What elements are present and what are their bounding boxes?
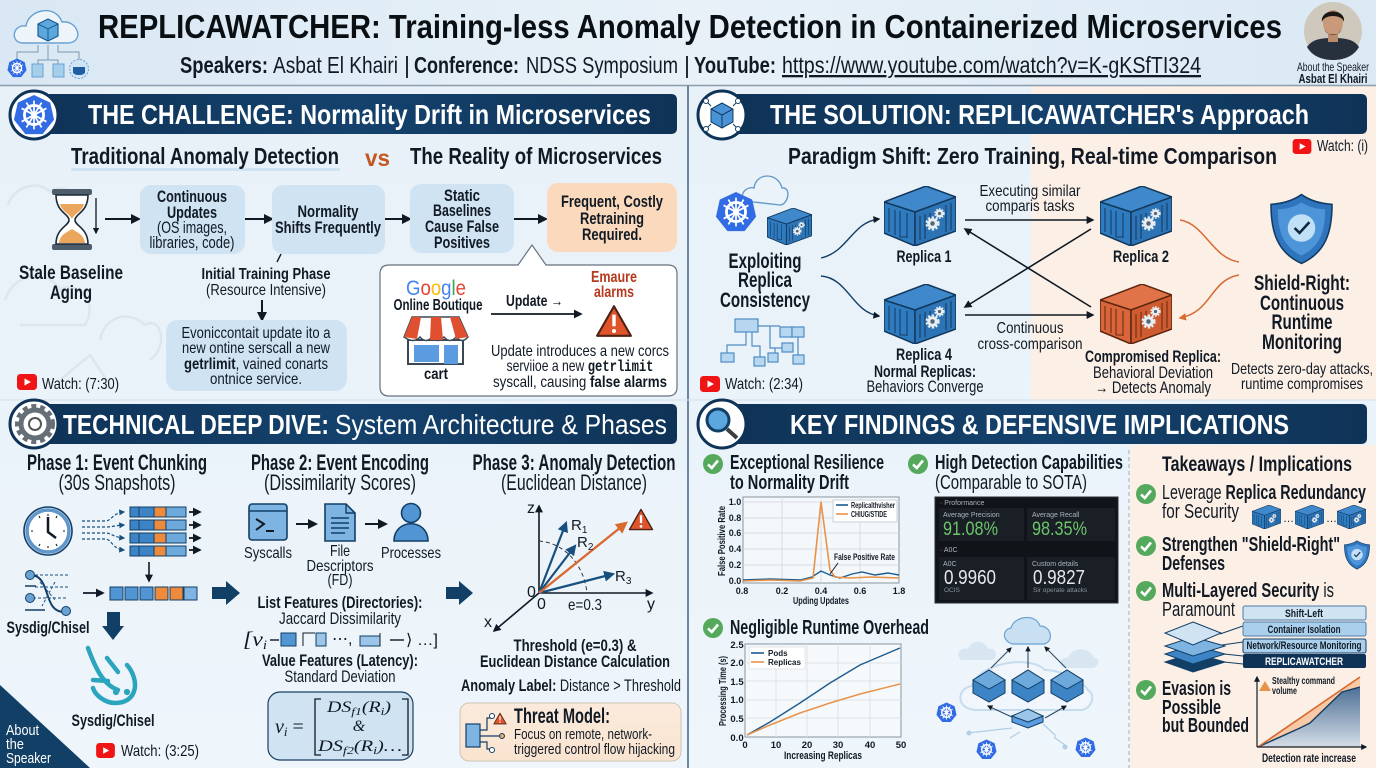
takeaway: evasion: Evasion is: [1162, 678, 1231, 700]
formula box: )…: [376, 738, 402, 755]
layer stack labels: [1243, 606, 1366, 668]
chart: false positive rate: 0.4: [815, 586, 827, 596]
finding: negligible overhead: Negligible Runtime Overhead: [730, 617, 929, 639]
arrow: [365, 523, 386, 525]
chart: processing time: 2.5: [730, 640, 744, 651]
initial training phase note: (Resource Intensive): [206, 282, 326, 299]
panel: key findings: [698, 400, 1370, 768]
chart: processing time: 30: [833, 740, 843, 751]
chart: processing time: 0: [742, 740, 748, 751]
chart: euclidean vector space: 2: [588, 542, 594, 553]
arrow: phase 1 to 2: [212, 581, 240, 605]
note: detects zero-day: [1231, 361, 1373, 393]
formula box: (R: [354, 738, 373, 755]
banner: the challenge: THE CHALLENGE: Normality Drift in Microservices: [88, 99, 651, 130]
banner: the challenge: [10, 91, 677, 139]
box: normality shifts: Shifts Frequently: [275, 219, 382, 237]
chart: evasion bound: Stealthy command: [1272, 675, 1335, 687]
finding: high detection: (Comparable to SOTA): [935, 472, 1087, 494]
box: static baselines: Cause False: [425, 218, 499, 236]
chart: false positive rate: False Positive Rate: [717, 506, 728, 576]
chart: processing time: 10: [771, 740, 781, 751]
chunk row: [83, 587, 197, 600]
icon: store: [404, 317, 468, 364]
box: continuous updates: Updates: [167, 204, 217, 222]
box: static baselines: Baselines: [433, 202, 491, 220]
alarm label: [591, 269, 637, 301]
dashboard: metrics: A0C: [943, 561, 957, 568]
chart: euclidean vector space: R: [571, 517, 582, 534]
chart: false positive rate: False Positive Rate: [834, 552, 895, 563]
icon: syscalls terminal: Syscalls: [244, 545, 292, 562]
replica 2: Replica 2: [1113, 247, 1169, 266]
takeaway: evasion: Possible: [1162, 697, 1221, 719]
chart: euclidean vector space: R: [577, 534, 588, 551]
chart: processing time: 2.0: [730, 658, 744, 669]
compromised replica: [1085, 284, 1221, 397]
speaker / conference line: |: [684, 52, 690, 78]
label: sysdig chisel logo: Sysdig/Chisel: [72, 711, 154, 730]
comparison heading: [71, 143, 662, 171]
label: executing similar: comparis tasks: [986, 198, 1074, 215]
heading: phase 3: Phase 3: Anomaly Detection: [472, 450, 676, 475]
dashboard: metrics: · A0C: [940, 547, 958, 554]
box: frequent retraining: Required.: [582, 225, 642, 244]
corner tab: about the speaker: the: [6, 736, 24, 753]
panel: the solution: [698, 91, 1373, 397]
finding: negligible overhead: [703, 617, 929, 639]
chart: processing time: 1.5: [730, 677, 744, 688]
heading: phase 3: (Euclidean Distance): [501, 470, 647, 495]
takeaway: shield-right: [1136, 534, 1370, 575]
chart: processing time: [718, 640, 906, 762]
chart: euclidean vector space: y: [647, 596, 655, 613]
header band: [0, 0, 1376, 86]
takeaway: replica redundancy: [1136, 482, 1367, 529]
formula box: i: [284, 724, 288, 739]
replica 1: Replica 1: [896, 247, 952, 266]
speaker / conference line: YouTube:: [694, 52, 776, 78]
threshold text: Euclidean Distance Calculation: [480, 652, 670, 671]
corner tab: about the speaker: [0, 685, 90, 768]
label: stale baseline aging: Stale Baseline: [19, 262, 123, 284]
value features: Standard Deviation: [284, 667, 396, 686]
label: shield-right: Continuous: [1260, 292, 1344, 315]
chart: evasion bound: volume: [1272, 685, 1297, 697]
box: frequent retraining: Retraining: [580, 209, 644, 228]
arrow: phase 2 to 3: [446, 581, 473, 605]
label: continuous cross-comparison: cross-comparison: [978, 336, 1082, 353]
chart: false positive rate: 0.6: [854, 586, 866, 596]
heading: phase 2: Phase 2: Event Encoding: [251, 450, 429, 475]
chart: euclidean vector space: 0: [527, 584, 536, 601]
speaker caption: [1297, 60, 1369, 86]
formula box: DS: [318, 738, 338, 755]
icon: network diagram: [721, 319, 804, 366]
comparison heading: Traditional Anomaly Detection: [71, 143, 339, 169]
box: static baselines: [410, 184, 514, 253]
initial training phase note: [202, 254, 331, 320]
chart: processing time: 1.0: [730, 695, 744, 706]
update arrow: [491, 293, 581, 314]
chart: processing time: Replicas: [768, 658, 801, 667]
chart: euclidean vector space: R: [615, 568, 626, 585]
box: static baselines: Static: [444, 187, 480, 205]
alarm explanation: syscall, causing false alarms: [493, 374, 667, 391]
formula box: i: [381, 706, 384, 718]
speaker / conference line: NDSS Symposium: [526, 52, 678, 78]
dashboard: metrics: OCIS: [944, 587, 961, 594]
jaccard vector row: [243, 627, 438, 652]
peach background: takeaways: [1130, 445, 1376, 768]
value features: [262, 651, 418, 686]
chart: processing time: 20: [802, 740, 812, 751]
label: stale baseline aging: [19, 262, 123, 304]
heading: phase 2: (Dissimilarity Scores): [264, 470, 416, 495]
comparison heading: vs: [365, 145, 390, 171]
chart: false positive rate: 0.2: [729, 560, 741, 570]
watch link 7:30: Watch: (7:30): [42, 376, 119, 393]
replica 4: [866, 284, 984, 396]
chart: euclidean vector space: 1: [582, 525, 588, 536]
label: exploiting replica consistency: [720, 250, 810, 312]
chart: processing time: 40: [865, 740, 875, 751]
list features: Jaccard Dissimilarity: [279, 609, 401, 628]
icon: file descriptors: [306, 504, 374, 589]
box: continuous updates: Continuous: [157, 188, 227, 206]
label: stale baseline aging: Aging: [50, 282, 92, 304]
alarm explanation: [491, 343, 669, 391]
panel: the challenge: [10, 91, 677, 396]
threat model box: Threat Model:: [514, 705, 610, 728]
speaker / conference line: [180, 52, 1201, 78]
callout: online boutique: [380, 245, 677, 396]
dashboard: metrics: · Proformance: [940, 500, 984, 507]
chart: false positive rate: 0.4: [729, 544, 741, 554]
label: executing similar: [980, 183, 1081, 215]
box: update description: getrlimit, vained conarts: [184, 356, 328, 373]
dashboard: metrics: 0.9827: [1033, 567, 1085, 589]
formula box: ): [383, 699, 391, 716]
chart: false positive rate: [717, 497, 905, 607]
box: update description: new ontine serscall a new: [182, 340, 330, 357]
dashboard: metrics: Average Precision: [943, 512, 1000, 519]
threshold text: [480, 636, 670, 671]
box: update description: ontnice service.: [210, 371, 302, 388]
formula box: f1: [351, 706, 362, 718]
update arrow: Update →: [506, 293, 563, 310]
icon: file descriptors: File: [330, 543, 350, 560]
chart: processing time: 50: [896, 740, 906, 751]
box: continuous updates: (OS images,: [157, 219, 227, 237]
comparison heading: The Reality of Microservices: [410, 143, 662, 169]
layer stack labels: Shift-Left: [1285, 608, 1323, 620]
box: continuous updates: libraries, code): [150, 234, 234, 252]
chart: false positive rate: CHIUG/STIDE: [851, 510, 887, 519]
dashed separator: [1128, 450, 1130, 768]
formula box: f2: [343, 745, 355, 757]
icon: clock: [24, 507, 72, 555]
label: exploiting replica consistency: Consistency: [720, 289, 810, 312]
logo: cloud with cube and nodes: [7, 11, 89, 78]
box: frequent retraining: Frequent, Costly: [561, 192, 663, 211]
chart: false positive rate: 0.0: [729, 576, 741, 586]
takeaway: replica redundancy: …: [1283, 513, 1294, 525]
banner: technical deep dive: System Architecture & Phases: [335, 409, 667, 440]
alarm label: alarms: [594, 284, 634, 301]
finding: exceptional resilience: Exceptional Resilience: [730, 452, 884, 474]
chart: false positive rate: 1.8: [893, 586, 905, 596]
initial training phase note: Initial Training Phase: [202, 266, 331, 283]
jaccard vector row: ⋯,: [332, 631, 352, 648]
cart label: cart: [424, 366, 448, 383]
watch link i: [1293, 138, 1368, 155]
alarm explanation: serviioe a new getrlimit: [506, 358, 654, 376]
speaker / conference line: https://www.youtube.com/watch?v=K-gKSfTI324: [782, 52, 1201, 78]
chart: false positive rate: Upding Updates: [793, 596, 849, 607]
icon: warning: [597, 306, 631, 336]
list features: List Features (Directories):: [258, 593, 422, 612]
chart: euclidean vector space: [484, 500, 655, 631]
threshold text: Threshold (e=0.3) &: [514, 636, 636, 655]
curved connectors: [821, 219, 879, 316]
panel: technical deep dive: [0, 400, 681, 768]
threat model box: [460, 703, 681, 761]
dashboard: metrics: Sir operate attacks: [1033, 587, 1088, 594]
compromised replica: → Detects Anomaly: [1095, 379, 1212, 397]
chart: euclidean vector space: x: [484, 614, 492, 631]
icon: shield: [1271, 195, 1332, 263]
box: static baselines: Positives: [434, 234, 490, 252]
label: shield-right: Runtime: [1272, 311, 1332, 334]
label: continuous cross-comparison: [978, 320, 1082, 353]
heading: phase 1: Phase 1: Event Chunking: [27, 450, 207, 475]
orange connectors: [1180, 220, 1239, 318]
heading: paradigm shift: Paradigm Shift: Zero Training, Real-time Comparison: [788, 143, 1277, 169]
compromised replica: Compromised Replica:: [1085, 348, 1221, 366]
formula box: i: [373, 745, 377, 757]
watch link 2:34: Watch: (2:34): [725, 376, 803, 393]
threat model box: Focus on remote, network-: [514, 726, 652, 743]
speaker photo: [1304, 2, 1362, 60]
chart: evasion bound: [1257, 675, 1366, 765]
takeaway: evasion: [1136, 678, 1249, 737]
alarm explanation: Update introduces a new corcs: [491, 343, 669, 360]
chart: euclidean vector space: e=0.3: [568, 597, 602, 614]
layer stack labels: REPLICAWATCHER: [1265, 656, 1343, 668]
icon: file descriptors: (FD): [328, 572, 352, 589]
label: exploiting replica consistency: Exploiting: [728, 250, 802, 273]
formula box: &: [353, 718, 366, 735]
takeaway: multi-layered security: Paramount: [1162, 599, 1235, 621]
icon: file descriptors: Descriptors: [306, 558, 374, 575]
chart: euclidean vector space: 3: [626, 576, 632, 587]
replica 2: [1100, 186, 1172, 266]
icon: processes: Processes: [381, 545, 441, 562]
speaker / conference line: Conference:: [414, 52, 519, 78]
divider: [687, 86, 689, 768]
dashboard: metrics: 98.35%: [1032, 519, 1087, 540]
corner tab: about the speaker: Speaker: [6, 750, 51, 767]
label: sysdig chisel: Sysdig/Chisel: [6, 618, 90, 637]
formula box: (R: [362, 699, 381, 716]
chart: false positive rate: Replicalthvisher: [851, 501, 895, 510]
heading: phase 2: [251, 450, 429, 495]
box: normality shifts: [272, 185, 385, 254]
jaccard vector row: [v: [243, 627, 260, 651]
banner: key findings: [698, 400, 1367, 448]
watch link 7:30: [17, 374, 119, 393]
banner: technical deep dive: [10, 400, 677, 448]
finding: exceptional resilience: [703, 452, 884, 494]
takeaway: evasion: but Bounded: [1162, 715, 1249, 737]
box: update description: Evoniccontait update ito a: [182, 325, 331, 342]
icon: kubernetes cloud container: [716, 176, 812, 245]
finding: high detection: [908, 452, 1123, 494]
value features: Value Features (Latency):: [262, 651, 418, 670]
formula box: =: [288, 716, 304, 738]
replica 1: [884, 186, 956, 266]
takeaway: replica redundancy: …: [1326, 513, 1337, 525]
watch link 3:25: Watch: (3:25): [121, 743, 199, 760]
icon: layers: [1165, 622, 1243, 672]
dashboard: metrics: 0.9960: [944, 567, 996, 589]
arrow: down: [102, 612, 124, 640]
replica 4: Normal Replicas:: [874, 363, 976, 381]
banner: key findings: KEY FINDINGS & DEFENSIVE IMPLICATIONS: [790, 409, 1289, 440]
replica 4: Behaviors Converge: [866, 378, 984, 396]
takeaway: shield-right: Defenses: [1162, 553, 1225, 575]
alarm label: Emaure: [591, 269, 637, 286]
label: executing similar: Executing similar: [980, 183, 1081, 200]
layer stack labels: Container Isolation: [1268, 624, 1341, 636]
takeaway: replica redundancy: for Security: [1162, 501, 1239, 523]
arrow: [296, 523, 316, 525]
formula box: v: [275, 716, 284, 738]
chart: euclidean vector space: 0: [537, 596, 546, 613]
chart: euclidean vector space: z: [527, 500, 535, 517]
heading: phase 1: [27, 450, 207, 495]
box: frequent retraining: [547, 183, 677, 252]
banner: technical deep dive: TECHNICAL DEEP DIVE:: [63, 409, 329, 440]
chart: processing time: 0.5: [730, 714, 744, 725]
label: exploiting replica consistency: Replica: [738, 269, 792, 292]
list features: [258, 593, 422, 628]
dashboard: metrics: Custom details: [1032, 561, 1079, 568]
chart: processing time: Pods: [768, 649, 788, 658]
jaccard vector row: ⟩ …]: [406, 632, 438, 649]
banner: the solution: [698, 91, 1367, 139]
dashboard: metrics: [935, 497, 1118, 603]
box: continuous updates: [140, 185, 245, 254]
google logo: Google: [406, 277, 466, 300]
heading: phase 1: (30s Snapshots): [58, 470, 176, 495]
speaker / conference line: Asbat El Khairi: [273, 52, 398, 78]
formula box: DS: [327, 699, 347, 716]
peach background: solution right side: [1031, 85, 1376, 400]
label: continuous cross-comparison: Continuous: [996, 320, 1064, 337]
replica 4: Replica 4: [896, 345, 952, 364]
chart: processing time: Processing Time (s): [718, 656, 729, 726]
label: shield-right: Monitoring: [1262, 331, 1342, 354]
threat model box: triggered control flow hijacking: [514, 741, 675, 758]
takeaway: multi-layered security: Multi-Layered Security is: [1162, 580, 1334, 602]
dashboard: metrics: 91.08%: [943, 519, 998, 540]
label: shield-right: [1254, 272, 1350, 354]
compromised replica: Behavioral Deviation: [1093, 364, 1213, 382]
takeaway: multi-layered security: [1136, 580, 1366, 672]
chart: false positive rate: 0.2: [776, 586, 788, 596]
sysdig tracer icon: [25, 570, 70, 616]
icon: hourglass: [52, 189, 96, 250]
jaccard vector row: i: [263, 637, 267, 652]
cross-comparison arrows: [965, 220, 1093, 315]
watch link 3:25: [96, 743, 199, 760]
corner tab: about the speaker: About: [6, 722, 40, 739]
icon: processes: [381, 504, 441, 562]
diagram: cloud replicas: [936, 618, 1098, 759]
finding: high detection: High Detection Capabilities: [935, 452, 1123, 474]
box: normality shifts: Normality: [298, 203, 359, 221]
chart: processing time: 0.0: [730, 733, 744, 744]
event stream bars: [82, 507, 200, 581]
chart: false positive rate: 0.8: [736, 586, 748, 596]
online boutique label: Online Boutique: [394, 297, 483, 314]
icon: sysdig logo: [88, 648, 135, 703]
finding: exceptional resilience: to Normality Drift: [730, 472, 849, 494]
speaker / conference line: |: [404, 52, 410, 78]
chart: false positive rate: 0.8: [729, 513, 741, 523]
anomaly label: Anomaly Label: Distance > Threshold: [461, 676, 681, 695]
watch link 2:34: [700, 376, 803, 393]
speaker / conference line: Speakers:: [180, 52, 268, 78]
heading: phase 3: [472, 450, 676, 495]
formula box: [268, 692, 413, 760]
chart: processing time: Increasing Replicas: [784, 750, 862, 762]
chart: false positive rate: 1.0: [729, 497, 741, 507]
box: update description: [166, 320, 347, 391]
chart: false positive rate: 0.6: [729, 528, 741, 538]
dashboard: metrics: Average Recall: [1032, 512, 1080, 519]
icon: syscalls terminal: [244, 504, 292, 562]
decorative faint clouds: [5, 186, 161, 385]
flow arrows: [105, 218, 546, 220]
